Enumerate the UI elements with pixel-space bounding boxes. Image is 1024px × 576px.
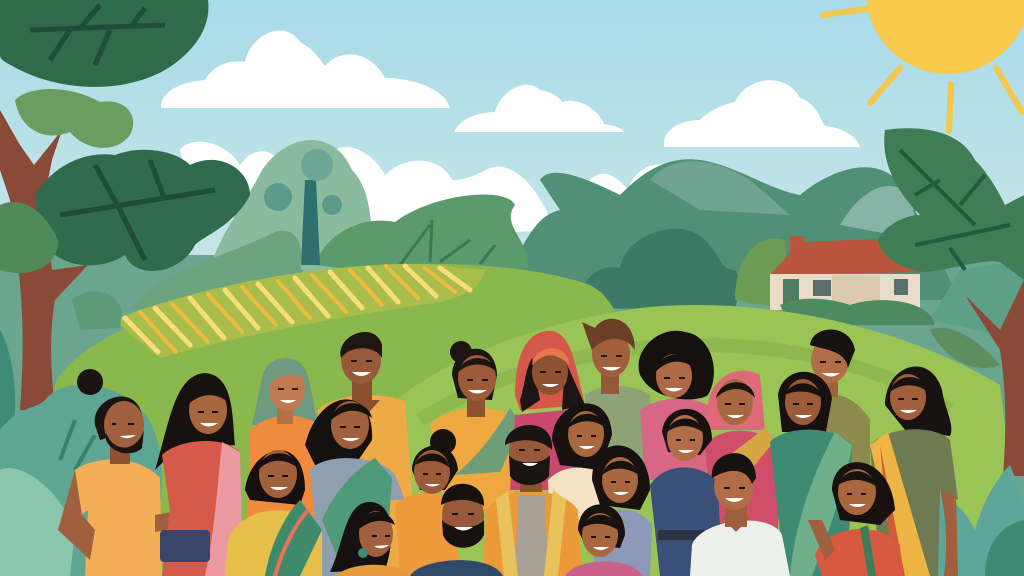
- person: woman in teal sari: [770, 372, 852, 576]
- person: man in olive shirt: [810, 329, 870, 470]
- distant tree: [264, 149, 342, 265]
- person: woman with bun in orange: [395, 429, 460, 576]
- sky: [0, 0, 1024, 340]
- person: woman with long hair in grey top: [590, 445, 652, 576]
- person: front woman with earring: [330, 502, 412, 576]
- right background shrubs: [575, 229, 1024, 340]
- person: woman in red top, front right: [808, 462, 902, 576]
- person: woman with curly black hair: [639, 331, 714, 480]
- hill: back left: [40, 264, 629, 576]
- person: woman in red headscarf: [510, 331, 587, 490]
- foreground foliage: left: [0, 330, 162, 576]
- person: woman with dark hair in teal sari, centre-left: [305, 399, 405, 576]
- person: woman in pink headscarf: [705, 371, 780, 530]
- person: woman with bun in green sari: [430, 341, 522, 510]
- hill: front right: [375, 305, 1024, 576]
- person: woman in front left, green and yellow sari: [225, 450, 322, 576]
- foreground foliage: right: [926, 465, 1024, 576]
- person: woman in olive top and yellow sari, far right: [870, 366, 958, 576]
- person: woman with teal-grey hair: [246, 358, 322, 576]
- farmhouse: [770, 236, 920, 310]
- distant hills: [130, 140, 960, 310]
- background ground behind the hills: [0, 255, 1024, 576]
- person: man with brown hair in sage shirt: [582, 319, 655, 470]
- shrubs along the hill line: [780, 299, 935, 325]
- person: woman in red and pink sari: [155, 373, 243, 576]
- left tree: [0, 0, 250, 412]
- person: man in white t-shirt: [690, 453, 790, 576]
- wheat field: [114, 264, 485, 358]
- person: man in yellow shirt: [318, 332, 412, 576]
- person: bearded man in navy, front: [410, 484, 503, 576]
- person: bearded man in orange vest: [483, 425, 582, 576]
- person: woman with bun in pink, front: [565, 504, 643, 576]
- right tree: [878, 128, 1024, 476]
- person: man with top-knot in orange shirt: [58, 369, 215, 576]
- person: woman in navy dress: [650, 409, 722, 576]
- clouds: [161, 31, 860, 240]
- person: woman with white top: [548, 403, 612, 530]
- sun: [823, 0, 1024, 131]
